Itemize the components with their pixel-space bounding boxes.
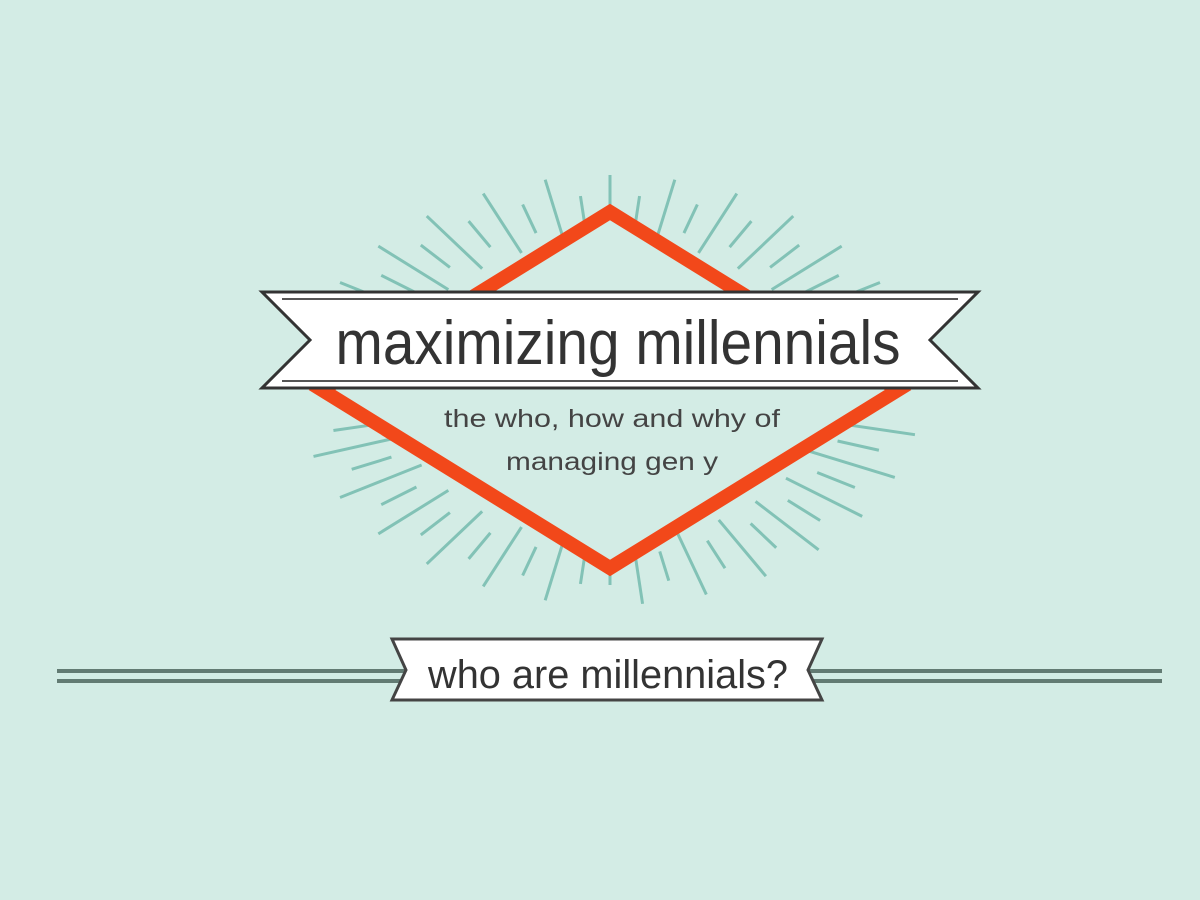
subtitle: the who, how and why of: [444, 405, 780, 433]
title banner: [262, 292, 978, 388]
title text: maximizing millennials: [336, 309, 900, 378]
orange diamond frame: [322, 212, 898, 568]
section divider lines: [57, 671, 1162, 681]
subtitle: managing gen y: [506, 448, 719, 476]
section banner: who are millennials: [392, 639, 822, 700]
subtitle: [444, 405, 780, 476]
sunburst rays: [314, 175, 915, 604]
section heading text: who are millennials?: [427, 653, 788, 697]
